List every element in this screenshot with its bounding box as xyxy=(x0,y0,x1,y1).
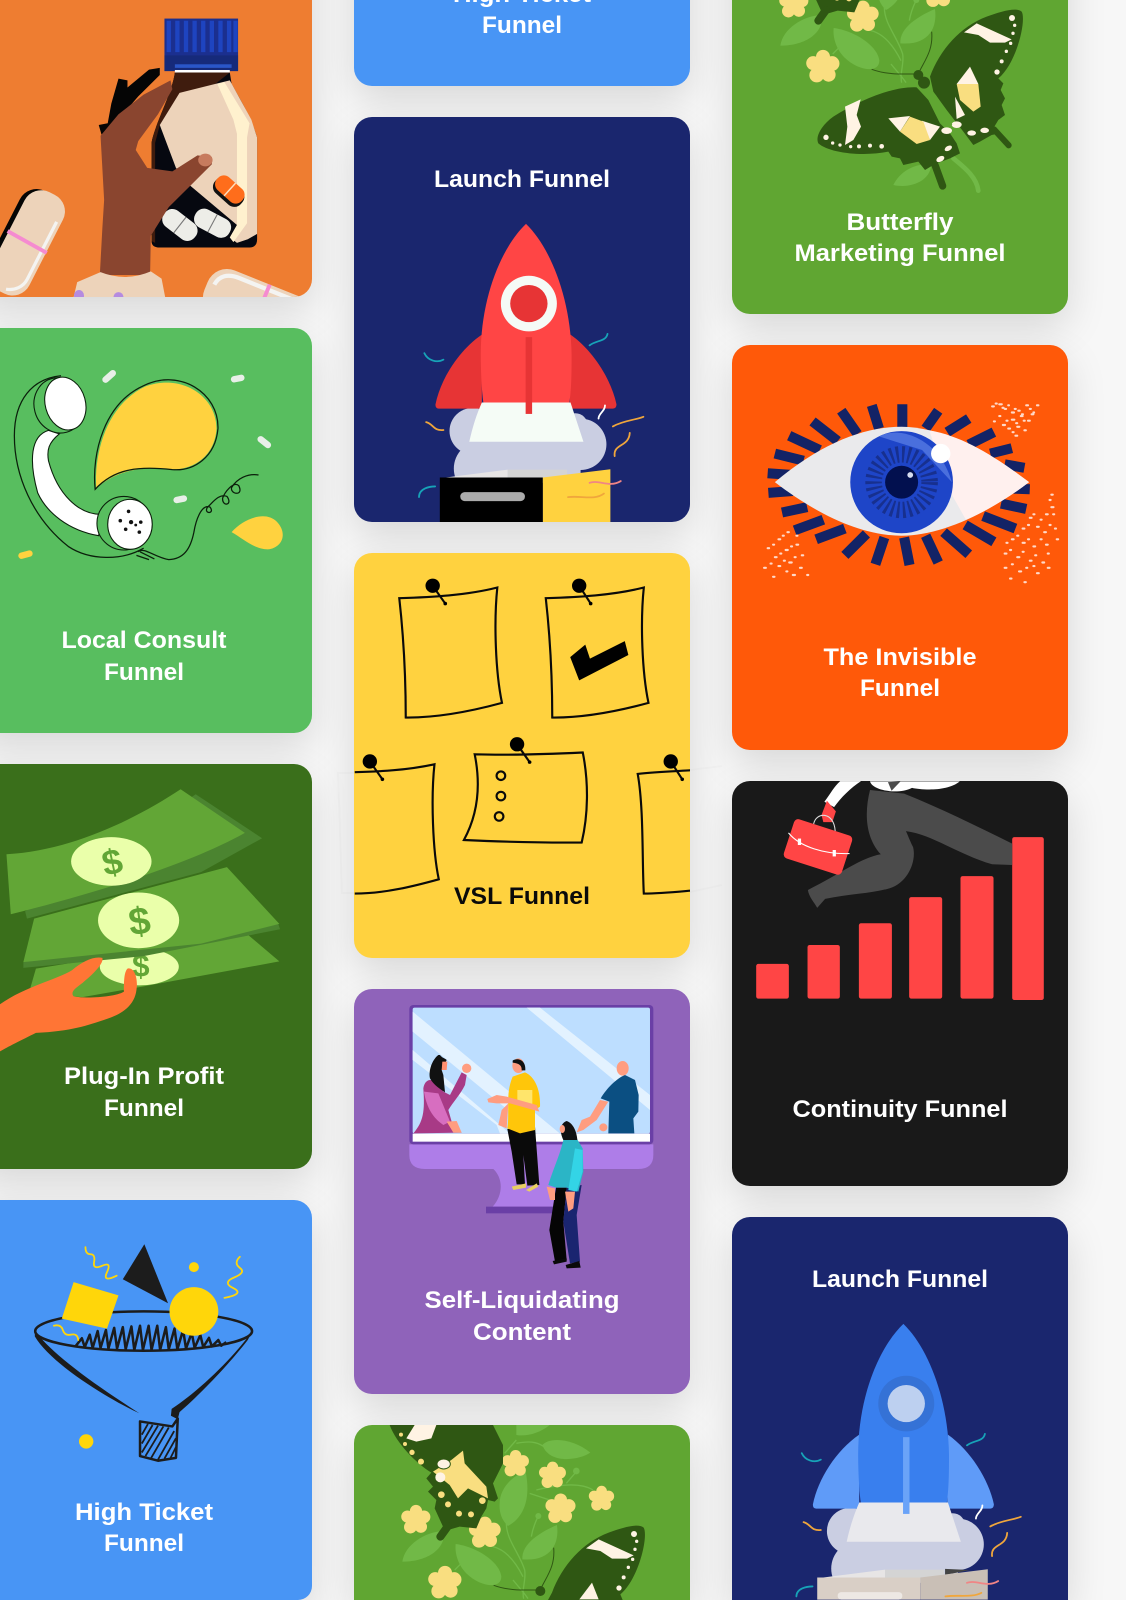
icon: hand holding medicine bottle with capsules xyxy=(0,19,325,353)
icon: red rocket launching from box xyxy=(419,224,643,563)
icon: rising bar chart xyxy=(756,837,1044,1000)
panel: The Invisible Funnel card xyxy=(732,345,1068,750)
icon: pinned sticky notes xyxy=(355,579,690,894)
man in yellow xyxy=(487,1058,540,1192)
icon: butterflies and yellow flowers xyxy=(390,1425,645,1600)
heading: VSL Funnel: VSL Funnel xyxy=(454,883,590,910)
heading: Plug-In Profit Funnel xyxy=(64,1063,224,1122)
panel: VSL Funnel card xyxy=(354,553,690,958)
heading: Plug-In Profit Funnel: Funnel xyxy=(104,1095,184,1122)
heading: The Invisible Funnel: The Invisible xyxy=(824,644,976,671)
heading: Plug-In Profit Funnel: Plug-In Profit xyxy=(64,1063,224,1090)
heading: Self-Liquidating Content: Self-Liquidating xyxy=(424,1287,620,1314)
icon: businessman leaping with red briefcase xyxy=(783,781,1012,908)
heading: High Ticket Funnel xyxy=(453,0,591,39)
woman in purple xyxy=(413,1055,471,1133)
heading: The Invisible Funnel: Funnel xyxy=(860,675,940,702)
icon: hand holding dollar bills: $ xyxy=(126,899,153,945)
heading: Butterfly Marketing Funnel: Butterfly xyxy=(846,209,954,236)
heading: Launch Funnel: Launch Funnel xyxy=(812,1266,988,1293)
heading: High Ticket Funnel: Funnel xyxy=(482,12,562,39)
icon: blue rocket launching from box xyxy=(796,1324,1021,1600)
woman in teal xyxy=(547,1121,583,1268)
heading: High Ticket Funnel: Funnel xyxy=(104,1530,184,1557)
heading: Local Consult Funnel xyxy=(62,627,226,686)
man in blue xyxy=(577,1061,639,1133)
heading: Self-Liquidating Content: Content xyxy=(473,1319,571,1346)
panel: orange medicine card xyxy=(0,0,312,297)
icon: monitor with people talking xyxy=(409,1005,653,1268)
heading: Butterfly Marketing Funnel xyxy=(794,209,1006,267)
panel: Local Consult Funnel card xyxy=(0,328,312,733)
icon: eye with radiating lashes xyxy=(764,404,1058,582)
heading: The Invisible Funnel xyxy=(824,644,976,702)
icon: hand holding dollar bills: $ xyxy=(98,841,126,884)
heading: Self-Liquidating Content xyxy=(424,1287,620,1346)
panel: Launch Funnel card (blue rocket) xyxy=(732,1217,1068,1600)
panel: butterfly illustration card (bottom, cropped) xyxy=(354,1425,690,1600)
heading: Continuity Funnel: Continuity Funnel xyxy=(792,1096,1008,1123)
panel: Continuity Funnel card xyxy=(732,781,1068,1186)
heading: Local Consult Funnel: Local Consult xyxy=(62,627,226,654)
panel: High Ticket Funnel card (top, cropped) xyxy=(354,0,690,86)
panel: Plug-In Profit Funnel card xyxy=(0,764,312,1169)
panel: Self-Liquidating Content card xyxy=(354,989,690,1394)
panel: Butterfly Marketing Funnel card xyxy=(732,0,1068,314)
heading: High Ticket Funnel: High Ticket xyxy=(75,1499,213,1526)
heading: Local Consult Funnel: Funnel xyxy=(104,659,184,686)
heading: Launch Funnel: Launch Funnel xyxy=(434,166,610,193)
panel: Launch Funnel card (red rocket) xyxy=(354,117,690,522)
icon: butterflies and yellow flowers xyxy=(768,0,1023,191)
icon: hand holding dollar bills xyxy=(0,789,280,1051)
panel: High Ticket Funnel card xyxy=(0,1200,312,1600)
icon: sketched funnel with shapes xyxy=(35,1244,252,1461)
heading: Butterfly Marketing Funnel: Marketing Funnel xyxy=(794,240,1006,267)
icon: hand holding dollar bills: $ xyxy=(132,948,150,983)
icon: telephone handset with speech bubble xyxy=(14,372,283,560)
heading: High Ticket Funnel xyxy=(75,1499,213,1557)
